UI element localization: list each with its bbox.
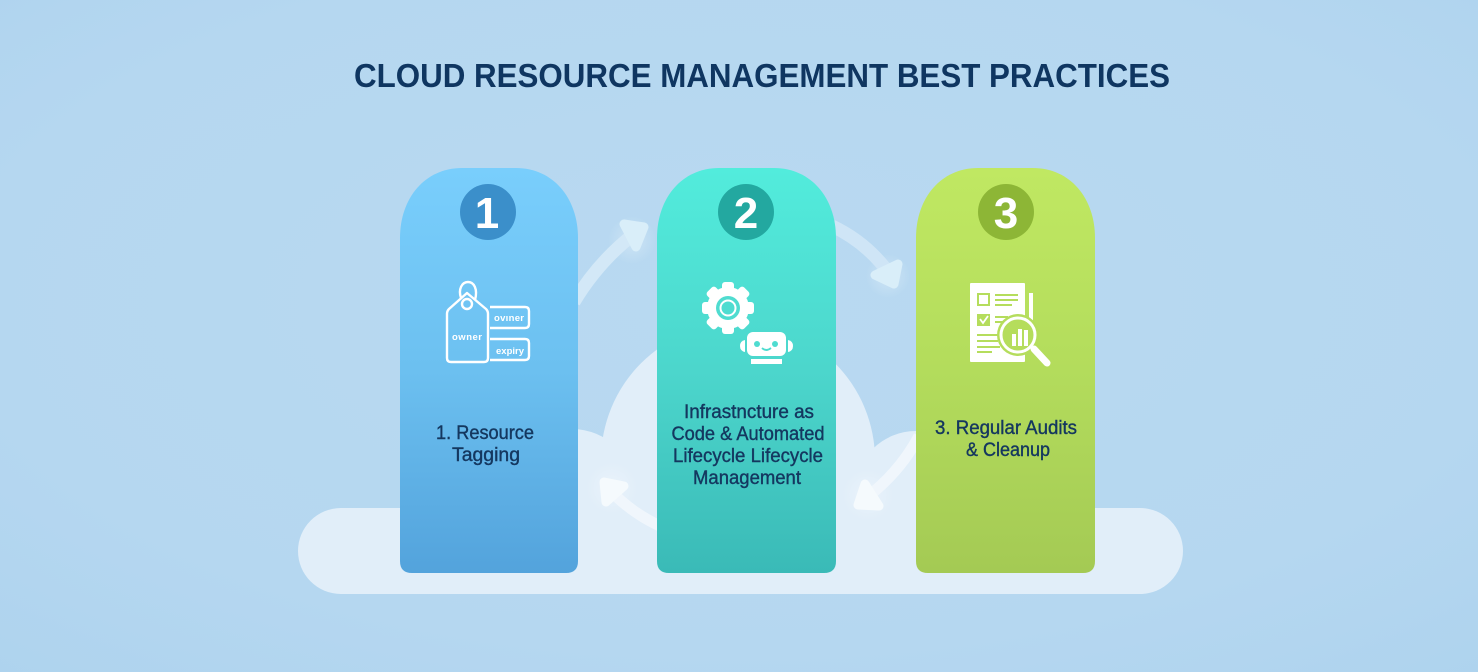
label: infrastructure as code: Infrastncture as [684, 401, 814, 423]
label: infrastructure as code: Code & Automated [672, 423, 824, 445]
icon: audit report with magnifier [970, 283, 1047, 363]
cloud backdrop [298, 350, 1183, 594]
arrow: step 2 to step 3 [832, 226, 910, 298]
infographic canvas [298, 64, 1183, 594]
arrow: step 1 to step 2 [574, 216, 656, 302]
panel: regular audits [916, 168, 1095, 573]
label: resource tagging: 1. Resource [436, 422, 534, 444]
icon: price tag with labels [447, 282, 529, 362]
number badge 1: 1 [475, 189, 499, 238]
number badge 3: 3 [994, 189, 1018, 238]
label: infrastructure as code [672, 401, 824, 489]
number badge 2 [718, 184, 774, 240]
arrow: cloud to step 1 [586, 462, 660, 526]
icon: price tag with labels: ovıner [494, 313, 524, 324]
number badge 2: 2 [734, 189, 758, 238]
icon: gear and robot [702, 282, 793, 364]
title: CLOUD RESOURCE MANAGEMENT BEST PRACTICES [354, 57, 1170, 94]
icon: price tag with labels: expiry [496, 346, 525, 357]
label: regular audits [935, 417, 1077, 461]
label: regular audits: & Cleanup [966, 439, 1050, 461]
label: regular audits: 3. Regular Audits [935, 417, 1077, 439]
number badge 1 [460, 184, 516, 240]
icon: price tag with labels: owner [452, 332, 482, 343]
label: infrastructure as code: Lifecycle Lifecycle [673, 445, 823, 467]
panel: resource tagging [400, 168, 578, 573]
label: resource tagging: Tagging [452, 444, 520, 466]
number badge 3 [978, 184, 1034, 240]
panel: infrastructure as code [657, 168, 836, 573]
label: resource tagging [436, 422, 534, 466]
label: infrastructure as code: Management [693, 467, 802, 489]
arrow: step 3 to cloud [842, 436, 919, 521]
